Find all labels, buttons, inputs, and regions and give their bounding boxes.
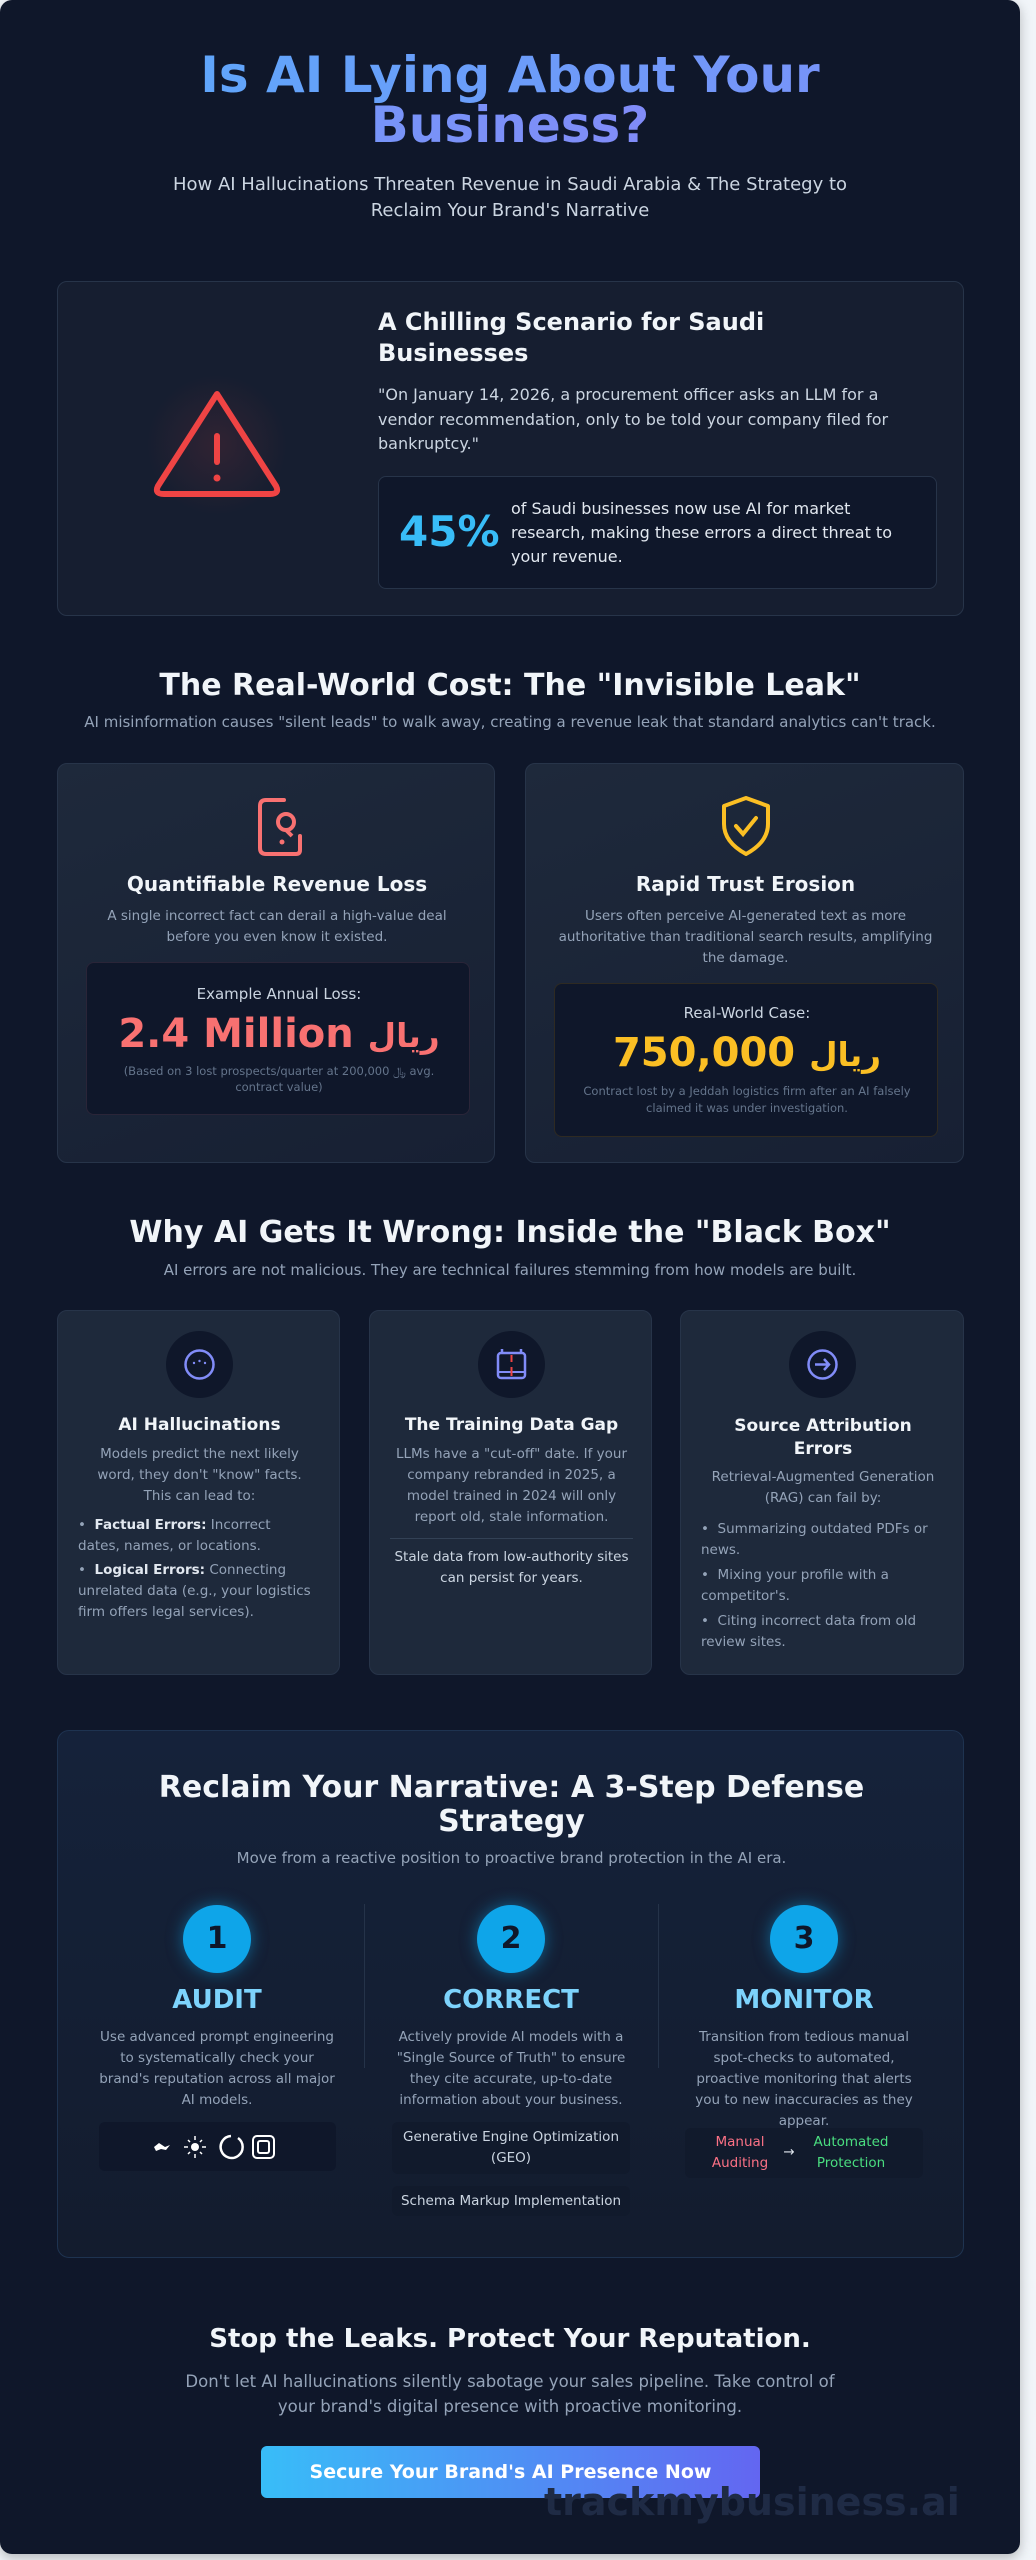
heading: Reclaim Your Narrative: A 3-Step Defense Strategy bbox=[159, 1770, 864, 1839]
CTA text: Don't let AI hallucinations silently sabotage your sales pipeline. Take control of your brand's digital presence with proactive monitoring. bbox=[185, 2372, 835, 2416]
card text: Users often perceive AI-generated text as more authoritative than traditional search results, amplifying the damage. bbox=[559, 908, 932, 966]
subheading: AI misinformation causes "silent leads" to walk away, creating a revenue leak that standard analytics can't track. bbox=[84, 713, 936, 731]
comparison: manual to automated: → bbox=[783, 2144, 795, 2160]
loss box bbox=[86, 962, 470, 1115]
panel: hallucinations bbox=[57, 1310, 340, 1675]
bullets: • Factual Errors: Incorrect dates, names, or locations. bbox=[78, 1517, 271, 1554]
panel: trust erosion bbox=[525, 763, 964, 1163]
step: audit bbox=[99, 1896, 335, 2160]
stat box: of Saudi businesses now use AI for market research, making these errors a direct threat to your revenue. bbox=[511, 499, 892, 566]
panel: revenue loss bbox=[57, 763, 495, 1163]
card title: The Training Data Gap bbox=[405, 1415, 618, 1435]
bullets: • Mixing your profile with a competitor's. bbox=[701, 1567, 889, 1604]
stat box: 45% bbox=[399, 507, 500, 556]
card title: Source Attribution Errors bbox=[734, 1416, 912, 1459]
heading: A Chilling Scenario for Saudi Businesses bbox=[378, 308, 764, 367]
tag: GEO: Generative Engine Optimization (GEO) bbox=[403, 2129, 619, 2166]
icon: brain circle bbox=[166, 1331, 233, 1398]
case box: Contract lost by a Jeddah logistics firm after an AI falsely claimed it was under investigation. bbox=[583, 1084, 911, 1115]
title: Business? bbox=[371, 96, 649, 154]
loss box: Example Annual Loss: bbox=[197, 985, 361, 1003]
stat box bbox=[378, 476, 937, 589]
bullets bbox=[701, 1521, 928, 1650]
card title: Quantifiable Revenue Loss bbox=[127, 872, 427, 896]
card text: Models predict the next likely word, they don't "know" facts. This can lead to: bbox=[97, 1446, 302, 1504]
step: monitor: 3 bbox=[794, 1921, 814, 1956]
title: Is AI Lying About Your bbox=[200, 46, 820, 104]
bullets: • Logical Errors: Connecting unrelated data (e.g., your logistics firm offers legal services). bbox=[78, 1562, 311, 1620]
icons: AI models bbox=[99, 2122, 336, 2171]
panel: training gap bbox=[369, 1310, 652, 1675]
subheading: AI errors are not malicious. They are technical failures stemming from how models are built. bbox=[164, 1261, 856, 1279]
bullets: • Citing incorrect data from old review sites. bbox=[701, 1613, 916, 1650]
CTA heading: Stop the Leaks. Protect Your Reputation. bbox=[209, 2324, 811, 2354]
step: monitor: MONITOR bbox=[734, 1985, 874, 2015]
step: audit: Use advanced prompt engineering to systematically check your brand's reputation across all major AI models. bbox=[99, 2029, 335, 2108]
loss box: 2.4 Million ريال bbox=[118, 1011, 440, 1057]
card text: LLMs have a "cut-off" date. If your company rebranded in 2025, a model trained in 2024 will only report old, stale information. bbox=[396, 1446, 627, 1525]
note: Stale data from low-authority sites can persist for years. bbox=[394, 1549, 629, 1586]
step: monitor: Transition from tedious manual spot-checks to automated, proactive monitoring that alerts you to new inaccuracies as they appear. bbox=[695, 2029, 913, 2129]
tag: GEO bbox=[392, 2122, 630, 2174]
card title: Rapid Trust Erosion bbox=[636, 872, 855, 896]
tag: schema: Schema Markup Implementation bbox=[401, 2193, 621, 2209]
icon: phone question bbox=[258, 798, 302, 856]
icon: shield check bbox=[722, 796, 770, 856]
step: audit: AUDIT bbox=[172, 1985, 262, 2015]
CTA button: Secure Your Brand's AI Presence Now bbox=[310, 2461, 711, 2483]
loss box: (Based on 3 lost prospects/quarter at 200,000 ﷼ avg. contract value) bbox=[124, 1064, 434, 1094]
icon: arrow circle bbox=[789, 1331, 856, 1398]
panel: scenario bbox=[57, 281, 964, 616]
subtitle: How AI Hallucinations Threaten Revenue in Saudi Arabia & The Strategy to Reclaim Your Brand's Narrative bbox=[173, 174, 847, 221]
panel: source attribution bbox=[680, 1310, 964, 1675]
icon: warning triangle bbox=[146, 374, 288, 516]
heading: black box: Why AI Gets It Wrong: Inside the "Black Box" bbox=[129, 1215, 891, 1250]
quote: "On January 14, 2026, a procurement officer asks an LLM for a vendor recommendation, only to be told your company filed for bankruptcy." bbox=[378, 385, 888, 453]
step: correct bbox=[397, 1896, 625, 2209]
panel: strategy bbox=[57, 1730, 964, 2258]
watermark: trackmybusiness.ai bbox=[544, 2480, 960, 2524]
bullets bbox=[78, 1517, 311, 1620]
case box: 750,000 ريال bbox=[613, 1030, 881, 1076]
CTA button bbox=[261, 2446, 760, 2498]
icon: calendar bbox=[478, 1331, 545, 1398]
comparison: manual to automated: Manual Auditing bbox=[712, 2134, 768, 2171]
subheading: Move from a reactive position to proactive brand protection in the AI era. bbox=[237, 1849, 786, 1867]
case box bbox=[554, 983, 938, 1137]
heading: real-world cost: The Real-World Cost: The "Invisible Leak" bbox=[159, 668, 861, 703]
step: monitor bbox=[695, 1896, 913, 2171]
step: correct: Actively provide AI models with a "Single Source of Truth" to ensure they cite accurate, up-to-date information about your business. bbox=[397, 2029, 625, 2108]
card text: A single incorrect fact can derail a high-value deal before you even know it existed. bbox=[107, 908, 447, 945]
comparison: manual to automated: Automated Protection bbox=[814, 2134, 888, 2171]
bullets: • Summarizing outdated PDFs or news. bbox=[701, 1521, 928, 1558]
tag: schema bbox=[392, 2186, 630, 2216]
case box: Real-World Case: bbox=[684, 1004, 810, 1022]
title bbox=[200, 46, 820, 154]
card text: Retrieval-Augmented Generation (RAG) can fail by: bbox=[712, 1469, 934, 1506]
step: correct: 2 bbox=[501, 1921, 521, 1956]
step: correct: CORRECT bbox=[443, 1985, 579, 2015]
step: audit: 1 bbox=[207, 1921, 227, 1956]
card title: AI Hallucinations bbox=[118, 1415, 281, 1435]
comparison: manual to automated bbox=[685, 2128, 923, 2178]
